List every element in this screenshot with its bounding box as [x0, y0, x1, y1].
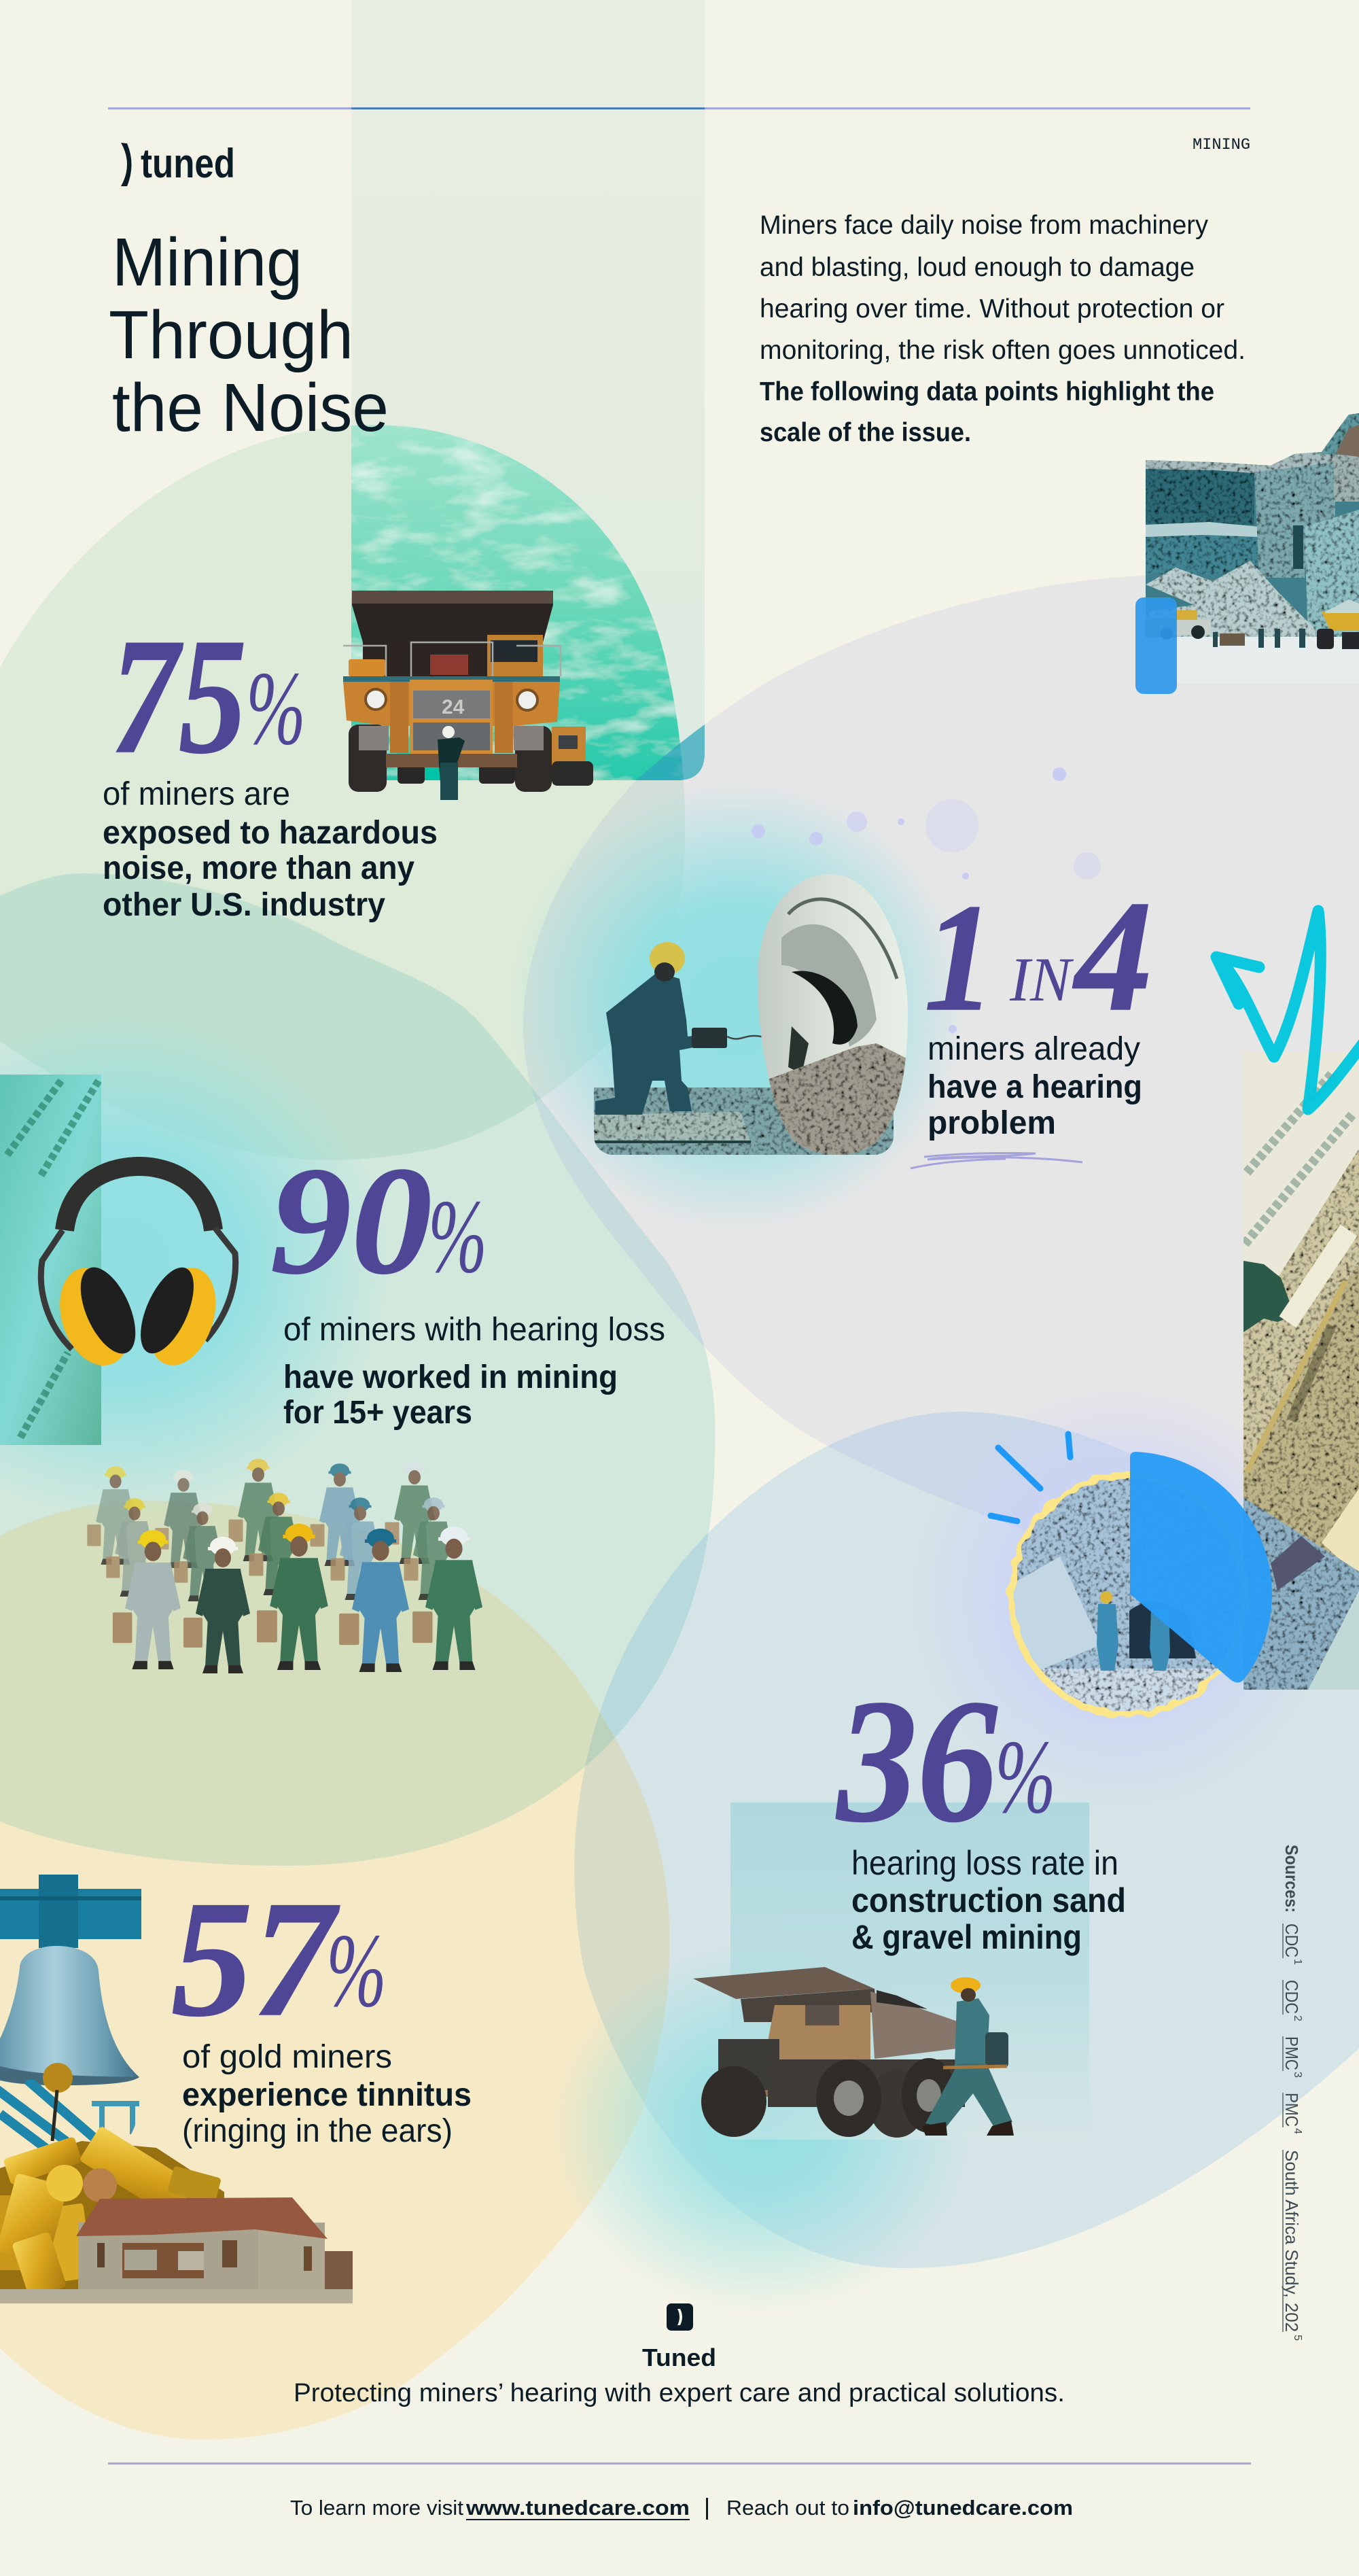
- stat number: 75: 75: [111, 604, 247, 788]
- title: [109, 224, 389, 446]
- footer brand block: [294, 2303, 1065, 2407]
- teal glow: dump truck: [550, 1944, 972, 2311]
- gold bars and coins: [0, 2125, 224, 2299]
- background blob: gray: [523, 574, 1359, 1584]
- sources: 3: [1292, 2072, 1303, 2078]
- title: the Noise: [112, 370, 389, 446]
- stat caption: of miners are: [103, 776, 290, 812]
- dump truck: [693, 1967, 965, 2138]
- percent sign: %: [995, 1718, 1056, 1835]
- category tag: MINING: [1193, 136, 1250, 154]
- title: Through: [109, 297, 353, 373]
- stat: 36%: [693, 1434, 1272, 2140]
- background blob: blue: [574, 1412, 1359, 2268]
- logo mark: [667, 2303, 693, 2331]
- stat caption: [851, 1844, 1126, 1956]
- sources: 1: [1292, 1959, 1303, 1965]
- stat caption: & gravel mining: [851, 1918, 1082, 1956]
- dump trucks and workers in quarry: [1146, 599, 1359, 649]
- stat caption: (ringing in the ears): [182, 2113, 453, 2149]
- intro paragraph: [760, 211, 1246, 447]
- group of miners walking: [87, 1459, 482, 1673]
- stat caption: hearing loss rate in: [851, 1844, 1118, 1882]
- icon: bell on gantry: [0, 1875, 141, 2168]
- footer contact line: [290, 2496, 1073, 2520]
- stat caption: noise, more than any: [103, 850, 414, 886]
- intro paragraph: Miners face daily noise from machinery: [760, 211, 1208, 240]
- top rule: [108, 107, 1250, 109]
- stat: 90%: [0, 1075, 665, 1673]
- stat caption: of miners with hearing loss: [283, 1312, 665, 1348]
- purple glow: tunnel: [911, 1387, 1332, 1808]
- sky photo panel: [730, 1803, 1089, 2140]
- blue quarter circle: [1130, 1452, 1272, 1683]
- percent sign: %: [246, 650, 306, 767]
- sources: PMC: [1282, 2036, 1302, 2070]
- footer contact line: info@tunedcare.com: [853, 2496, 1073, 2520]
- scribble arrow: [1216, 911, 1359, 1109]
- stat caption: [283, 1312, 665, 1431]
- sources: CDC: [1282, 1980, 1302, 2014]
- stat caption: exposed to hazardous: [103, 815, 438, 851]
- icon: ear defenders: [41, 1166, 236, 1375]
- abandoned house: [0, 2197, 353, 2303]
- intro paragraph: monitoring, the risk often goes unnoticed.: [760, 336, 1246, 365]
- background blob: top green: [0, 425, 685, 1160]
- stat number: 57: 57: [171, 1866, 340, 2051]
- truck: front view: [343, 591, 593, 792]
- footer contact line: www.tunedcare.com: [465, 2496, 690, 2520]
- walking miner with shovel: [922, 1977, 1014, 2136]
- stat: 1 in 4: [594, 767, 1152, 1168]
- sources: 4: [1292, 2128, 1303, 2134]
- teal glow: headphones: [0, 1009, 391, 1519]
- stat caption: [103, 776, 438, 923]
- stat caption: problem: [928, 1105, 1056, 1141]
- giant ear: [758, 874, 911, 1162]
- stat caption: [182, 2039, 472, 2149]
- stat caption: have worked in mining: [283, 1359, 618, 1395]
- worker in white hard hat: [438, 726, 465, 800]
- sources: [1282, 1845, 1303, 2341]
- brand name: Tuned: [642, 2344, 716, 2371]
- stat caption: other U.S. industry: [103, 887, 385, 923]
- background blob: yellow: [0, 1501, 669, 2439]
- tagline: Protecting miners’ hearing with expert care and practical solutions.: [294, 2379, 1065, 2407]
- tunnel photo with miners: [1011, 1475, 1246, 1716]
- aerial photo: left: [0, 1075, 101, 1445]
- stat: 75%: [103, 591, 593, 923]
- intro paragraph: scale of the issue.: [760, 418, 971, 447]
- footer contact line: Reach out to: [726, 2496, 849, 2520]
- sources: PMC: [1282, 2093, 1302, 2127]
- stat caption: miners already: [928, 1031, 1140, 1067]
- stat: 57%: [0, 1866, 472, 2303]
- worker kneeling with drill: [595, 942, 802, 1115]
- intro paragraph: The following data points highlight the: [760, 377, 1214, 406]
- stat caption: [928, 1031, 1142, 1141]
- stat caption: experience tinnitus: [182, 2077, 472, 2113]
- stat number: 90: 90: [270, 1136, 432, 1306]
- ground and rocks: [594, 1087, 894, 1155]
- stat number: 1: 1: [924, 873, 995, 1043]
- sources: Sources:: [1282, 1845, 1302, 1913]
- stat caption: have a hearing: [928, 1069, 1142, 1105]
- stat number: 4: 4: [1072, 867, 1152, 1044]
- hand drawn underline: [911, 1153, 1082, 1168]
- spark lines: [991, 1434, 1070, 1521]
- percent sign: %: [428, 1178, 487, 1295]
- sources: 2: [1292, 2015, 1303, 2021]
- teal glow: ear: [510, 782, 965, 1230]
- logo: tuned: tuned: [141, 141, 235, 186]
- stat caption: for 15+ years: [283, 1395, 472, 1431]
- quarry photo: top right: [1135, 408, 1359, 694]
- stat caption: of gold miners: [182, 2039, 392, 2075]
- aerial photo: right: [1243, 1052, 1359, 1690]
- sources: South Africa Study, 202: [1282, 2150, 1302, 2332]
- truck: front view: 24: [442, 696, 465, 718]
- intro paragraph: hearing over time. Without protection or: [760, 294, 1224, 324]
- percent sign: %: [326, 1912, 387, 2029]
- bottom rule: [108, 2462, 1251, 2465]
- sources: 5: [1292, 2335, 1303, 2341]
- intro paragraph: and blasting, loud enough to damage: [760, 253, 1195, 282]
- sound bubbles: [752, 767, 1101, 1033]
- footer contact line: To learn more visit: [290, 2496, 463, 2520]
- title: Mining: [112, 224, 302, 300]
- sources: CDC: [1282, 1924, 1302, 1957]
- stat word: in: IN: [1009, 945, 1074, 1014]
- stat caption: construction sand: [851, 1881, 1126, 1919]
- background blob: middle green: [0, 873, 716, 1866]
- tall quarry photo panel: [351, 0, 707, 782]
- stat number: 36: 36: [834, 1663, 998, 1859]
